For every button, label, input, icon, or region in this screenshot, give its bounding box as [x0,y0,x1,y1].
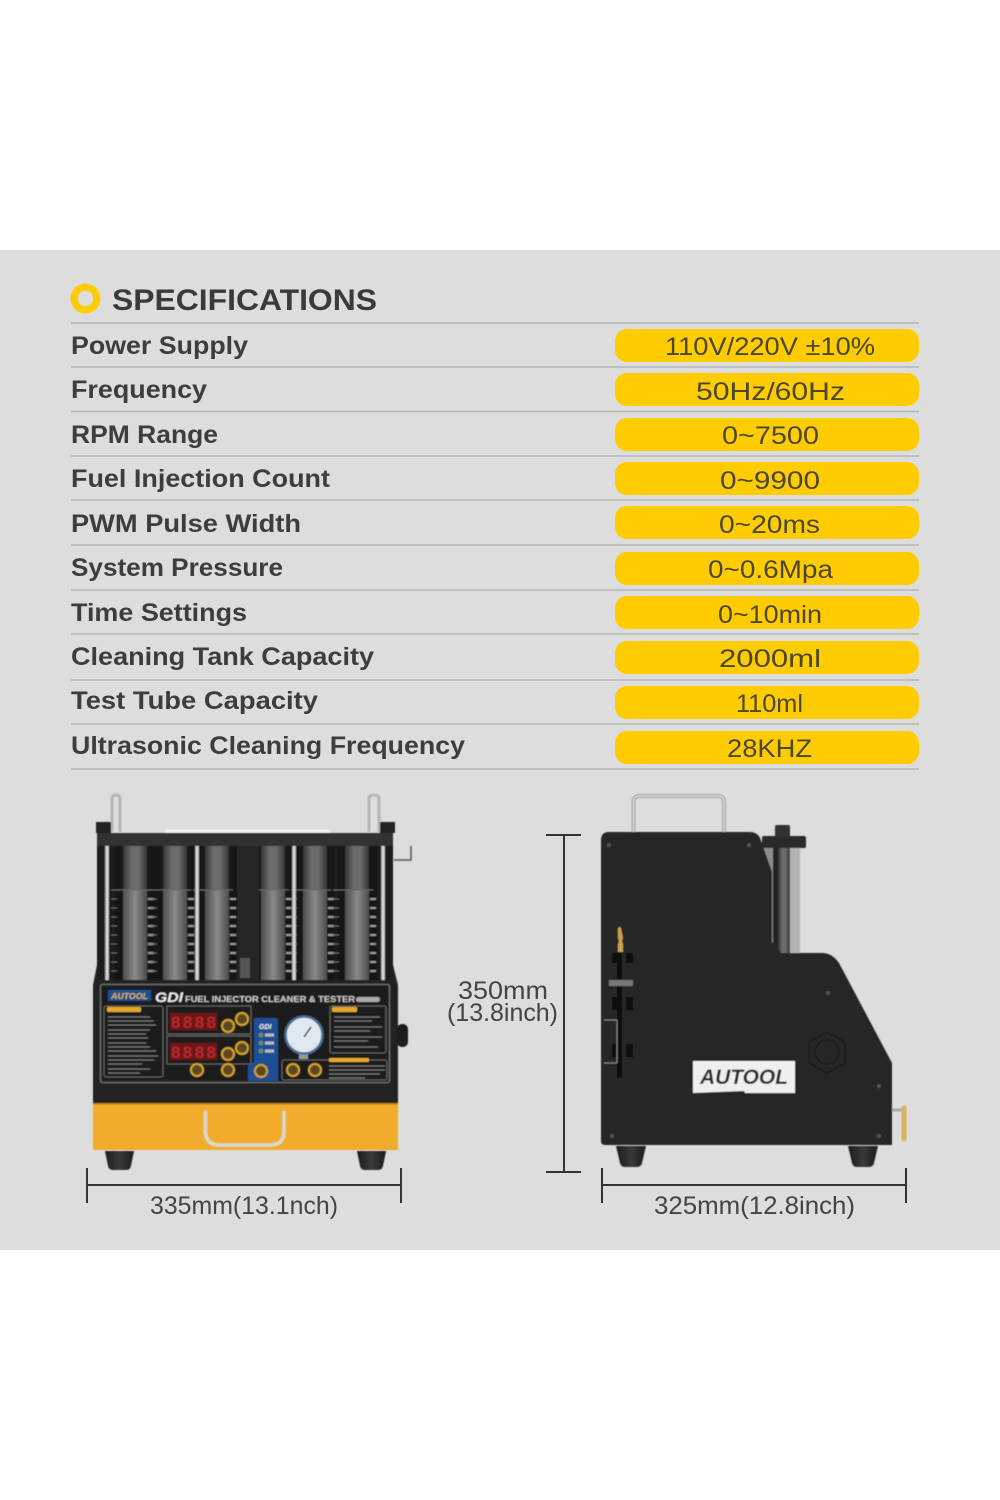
background panel [0,250,1000,1250]
row: power supply [71,329,919,362]
row: system pressure [71,552,919,585]
row: rpm range [71,418,919,451]
tube cap [762,836,806,848]
dimension: side depth: 325mm(12.8inch) [654,1192,855,1220]
side tube [762,845,800,955]
control panel: FUEL INJECTOR CLEANER & TESTER [185,995,355,1004]
front view machine [93,795,411,1170]
feet [616,1146,646,1167]
specifications table [71,323,919,769]
row: power supply: 110V/220V ±10% [665,333,875,361]
screws [607,843,881,1138]
panel title: GDI [155,989,184,1005]
dimension: height: 350mm [458,977,548,1005]
logo plate: AUTOOL [699,1066,788,1089]
row: pwm pulse width: 0~20ms [719,511,820,539]
control panel: AUTOOL [110,992,148,1001]
dimension: front width [87,1168,401,1220]
brass fitting [618,927,623,952]
control panel: 8888 [171,1043,216,1062]
row: fuel injection count [71,462,919,495]
row: fuel injection count: Fuel Injection Count [71,465,331,493]
feet [105,1151,134,1170]
row: fuel injection count: 0~9900 [720,467,820,495]
row: frequency: Frequency [71,376,207,404]
heading: specifications: SPECIFICATIONS [112,284,377,317]
control panel: GDI [259,1024,272,1031]
row: cleaning tank capacity: Cleaning Tank Capacity [71,643,374,671]
side rail [604,952,633,1078]
row: time settings [71,596,919,629]
drawer handle [206,1112,284,1145]
row: rpm range: 0~7500 [722,422,819,450]
vent [809,1032,845,1073]
yellow drawer [93,1103,398,1150]
row: power supply: Power Supply [71,332,248,360]
notes boxes [330,1006,386,1053]
control panel [100,984,390,1082]
handles on top [112,795,411,860]
row: cleaning tank capacity [71,641,919,674]
row: ultrasonic cleaning frequency: 28KHZ [727,735,812,763]
function menu list [104,1006,163,1077]
row: system pressure: 0~0.6Mpa [708,556,833,584]
icon: yellow ring [71,284,101,314]
row: system pressure: System Pressure [71,554,283,582]
brand badge [108,990,151,1001]
side view machine [601,796,904,1167]
row: time settings: 0~10min [718,601,822,629]
row: pwm pulse width: PWM Pulse Width [71,510,301,538]
row: rpm range: RPM Range [71,421,218,449]
silver rods [105,846,385,980]
blue select panel [248,1018,278,1081]
control panel: 8888 [171,1013,216,1032]
row: test tube capacity: 110ml [736,690,803,718]
row: frequency: 50Hz/60Hz [696,378,845,406]
side body [601,832,892,1145]
dimension: height: (13.8inch) [447,999,558,1027]
carry handle [634,796,724,832]
pressure gauge [299,1050,308,1059]
control body [93,965,398,1104]
dimension: height [447,835,581,1172]
buttons [191,1013,321,1076]
dimension: front width: 335mm(13.1nch) [150,1192,338,1220]
row: frequency [71,373,919,406]
row: test tube capacity: Test Tube Capacity [71,687,318,715]
red displays [167,1006,251,1034]
logo plate [693,1061,795,1093]
knob [397,1024,408,1047]
row: pwm pulse width [71,506,919,539]
row: test tube capacity [71,686,919,719]
row: ultrasonic cleaning frequency [71,731,919,764]
row: time settings: Time Settings [71,599,247,627]
graduated test tubes [111,846,377,980]
row: ultrasonic cleaning frequency: Ultrasonic Cleaning Frequency [71,732,465,760]
row: cleaning tank capacity: 2000ml [719,645,821,673]
upper tube frame [97,846,393,980]
drain lever [892,1108,903,1112]
dimension: side depth [602,1168,906,1220]
